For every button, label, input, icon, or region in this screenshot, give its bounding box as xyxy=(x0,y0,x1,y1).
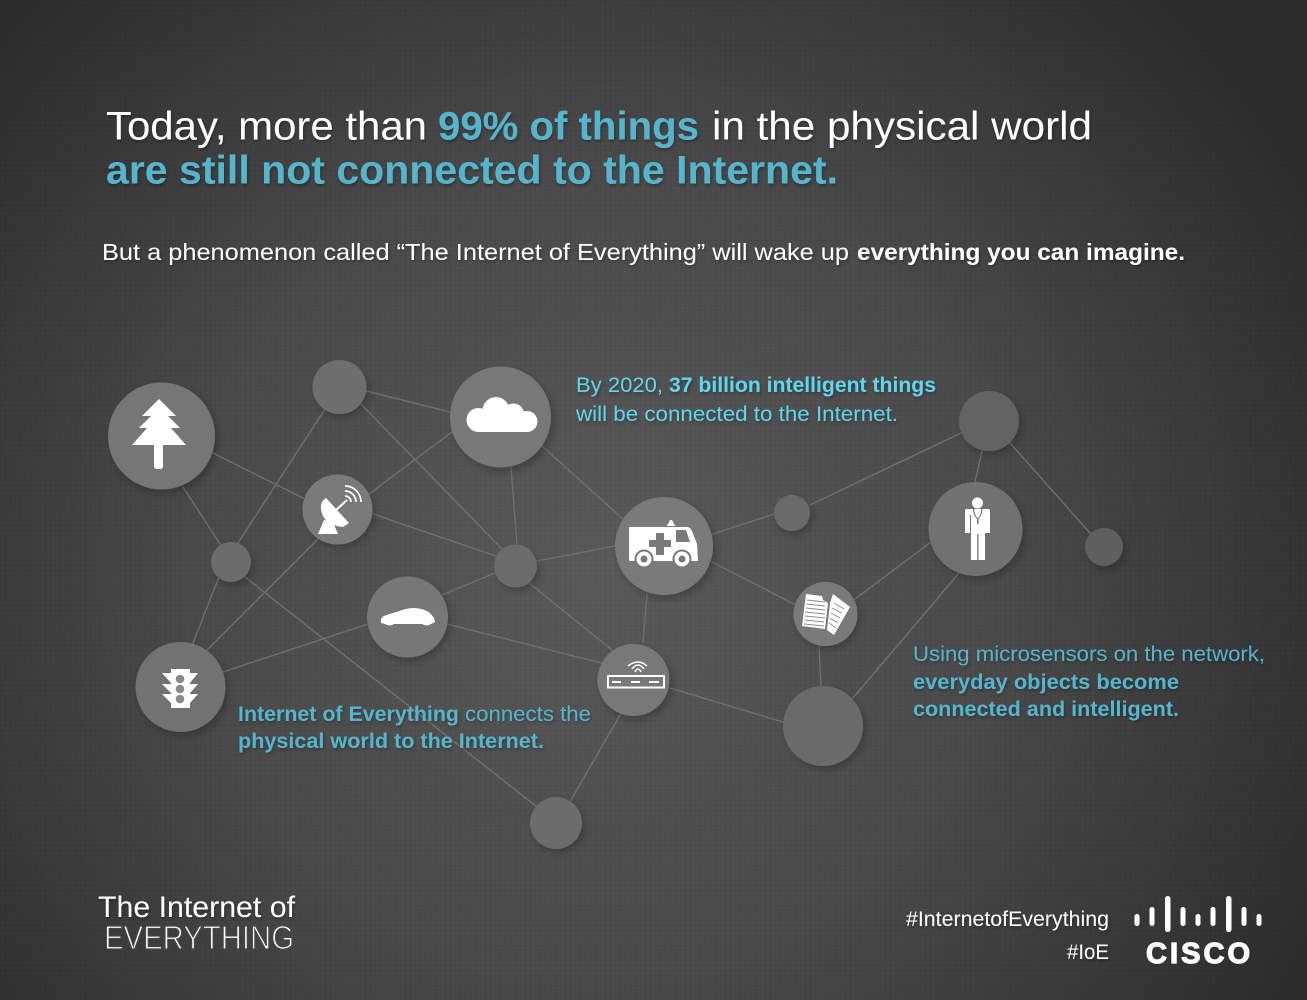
hashtags: #IoE xyxy=(1067,941,1109,964)
hashtags xyxy=(906,908,1109,964)
subtitle: But a phenomenon called “The Internet of Everything” will wake up xyxy=(102,239,849,265)
icon node: satellite dish xyxy=(302,474,372,544)
plain network nodes xyxy=(211,360,1123,849)
hashtags: #InternetofEverything xyxy=(906,908,1109,931)
network connections xyxy=(183,391,1090,807)
callout: 37 billion intelligent things: 37 billion intelligent things xyxy=(669,374,936,397)
icon node: person xyxy=(928,482,1022,576)
callout: connects the physical world: connects the xyxy=(465,703,591,726)
callout: connects the physical world: physical world to the Internet. xyxy=(238,730,544,753)
callout: 37 billion intelligent things: By 2020, xyxy=(576,374,663,397)
callout: microsensors xyxy=(913,643,1265,721)
logo: The Internet of Everything: EVERYTHING xyxy=(104,920,294,957)
logo: The Internet of Everything: The Internet of xyxy=(98,891,296,924)
title: are still not connected to the Internet. xyxy=(106,148,838,192)
logo: The Internet of Everything xyxy=(98,891,296,957)
logo: Cisco xyxy=(1134,896,1262,970)
icon node: ambulance xyxy=(615,497,713,595)
title xyxy=(106,104,1092,192)
callout: connects the physical world: Internet of Everything xyxy=(238,703,459,726)
callout: microsensors: Using microsensors on the network, xyxy=(913,643,1265,666)
icon node: traffic light xyxy=(136,642,226,732)
subtitle: everything you can imagine. xyxy=(857,239,1185,265)
icon node: car xyxy=(367,576,448,658)
callout: microsensors: connected and intelligent. xyxy=(913,698,1179,721)
title: in the physical world xyxy=(712,104,1092,148)
title: Today, more than xyxy=(106,104,427,148)
icon node: tree xyxy=(108,382,215,490)
icon node: documents xyxy=(794,582,858,646)
callout: connects the physical world xyxy=(238,703,591,753)
callout: microsensors: everyday objects become xyxy=(913,671,1179,694)
callout: 37 billion intelligent things: will be connected to the Internet. xyxy=(575,403,898,426)
title: 99% of things xyxy=(438,104,699,148)
icon node: router xyxy=(598,644,670,716)
callout: 37 billion intelligent things xyxy=(575,374,936,426)
icon node: cloud xyxy=(450,366,551,468)
subtitle xyxy=(102,239,1185,265)
logo: Cisco: CISCO xyxy=(1146,938,1250,970)
